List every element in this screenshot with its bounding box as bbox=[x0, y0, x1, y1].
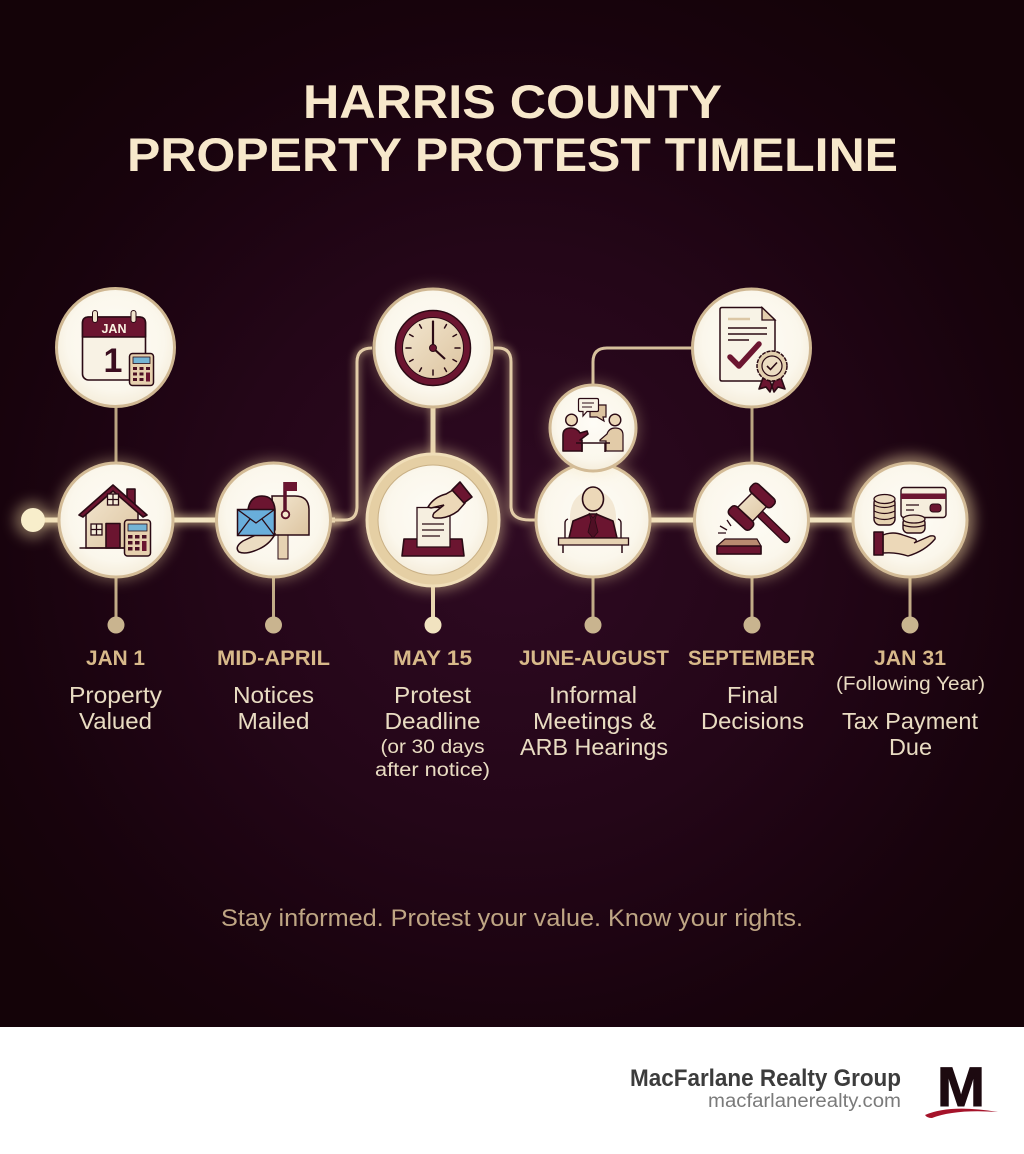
icon: speaker at podium bbox=[558, 487, 628, 553]
icon: coins, card and hand bbox=[874, 488, 946, 556]
company name: MacFarlane Realty Group bbox=[630, 1065, 901, 1092]
step 4: main circle, hearing speaker icon bbox=[533, 460, 653, 580]
label: June-August: ARB Hearings bbox=[520, 734, 668, 760]
label: September: SEPTEMBER bbox=[688, 647, 815, 670]
icon: calendar bbox=[82, 310, 154, 386]
icon: two people meeting bbox=[563, 398, 623, 452]
logo: M bbox=[937, 1055, 985, 1118]
label: Mid-April: MID-APRIL bbox=[217, 647, 330, 670]
label: June-August: Informal bbox=[549, 682, 637, 708]
icon: house with calculator bbox=[79, 485, 150, 556]
step 4: small circle, meeting icon bbox=[547, 382, 639, 474]
label: June-August: JUNE-AUGUST bbox=[519, 647, 669, 670]
footer band bbox=[0, 1027, 1024, 1154]
label: May 15: Deadline bbox=[384, 708, 480, 734]
label: Jan 1 bbox=[69, 647, 163, 734]
step 1: top circle, calendar icon bbox=[56, 288, 174, 406]
icon: gavel bbox=[717, 482, 786, 554]
label: September: Decisions bbox=[701, 708, 804, 734]
icon: calendar: 1 bbox=[104, 342, 122, 380]
label: May 15: after notice) bbox=[375, 760, 490, 781]
label: May 15: Protest bbox=[394, 682, 472, 708]
label: Jan 31: (Following Year) bbox=[836, 674, 985, 695]
title bbox=[127, 75, 898, 181]
icon: calendar: JAN bbox=[101, 322, 127, 336]
start dot bbox=[15, 502, 51, 538]
label: September: Final bbox=[727, 682, 778, 708]
icon: hand dropping ballot bbox=[402, 482, 472, 556]
label: Jan 1: Property bbox=[69, 682, 163, 708]
title: HARRIS COUNTY bbox=[303, 75, 722, 128]
step 6: main circle, payment icon bbox=[810, 456, 974, 584]
label: Jan 31: Tax Payment bbox=[842, 708, 979, 734]
timeline connectors bbox=[33, 348, 910, 625]
step 3: top circle, clock icon bbox=[372, 287, 494, 409]
label: June-August bbox=[519, 647, 669, 760]
label: Jan 1: Valued bbox=[79, 708, 152, 734]
label: September bbox=[688, 647, 815, 734]
label: June-August: Meetings & bbox=[533, 708, 656, 734]
label: May 15 bbox=[375, 647, 490, 781]
step 5: top circle, approved document icon bbox=[692, 289, 810, 407]
label: Mid-April: Notices bbox=[233, 682, 314, 708]
icon: approved document with seal bbox=[720, 308, 787, 392]
label: Mid-April: Mailed bbox=[238, 708, 310, 734]
title: PROPERTY PROTEST TIMELINE bbox=[127, 128, 898, 181]
label: May 15: (or 30 days bbox=[380, 737, 484, 758]
label: May 15: MAY 15 bbox=[393, 647, 472, 670]
label: Mid-April bbox=[217, 647, 330, 734]
label: Jan 31 bbox=[836, 647, 985, 760]
label: Jan 31: JAN 31 bbox=[874, 647, 946, 670]
label: Jan 31: Due bbox=[889, 734, 932, 760]
icon: clock bbox=[396, 310, 470, 386]
logo bbox=[925, 1055, 998, 1118]
icon: mailbox with envelope bbox=[237, 482, 309, 559]
step 2: main circle, mailbox icon bbox=[214, 460, 334, 580]
website: macfarlanerealty.com bbox=[708, 1091, 901, 1112]
tagline: Stay informed. Protest your value. Know your rights. bbox=[221, 905, 803, 932]
step 5: main circle, gavel icon bbox=[692, 460, 812, 580]
step 3: main circle, ballot icon (highlighted) bbox=[363, 450, 503, 590]
step 1: main circle, house icon bbox=[56, 460, 176, 580]
marker dots bbox=[108, 616, 918, 634]
label: Jan 1: JAN 1 bbox=[86, 647, 145, 670]
